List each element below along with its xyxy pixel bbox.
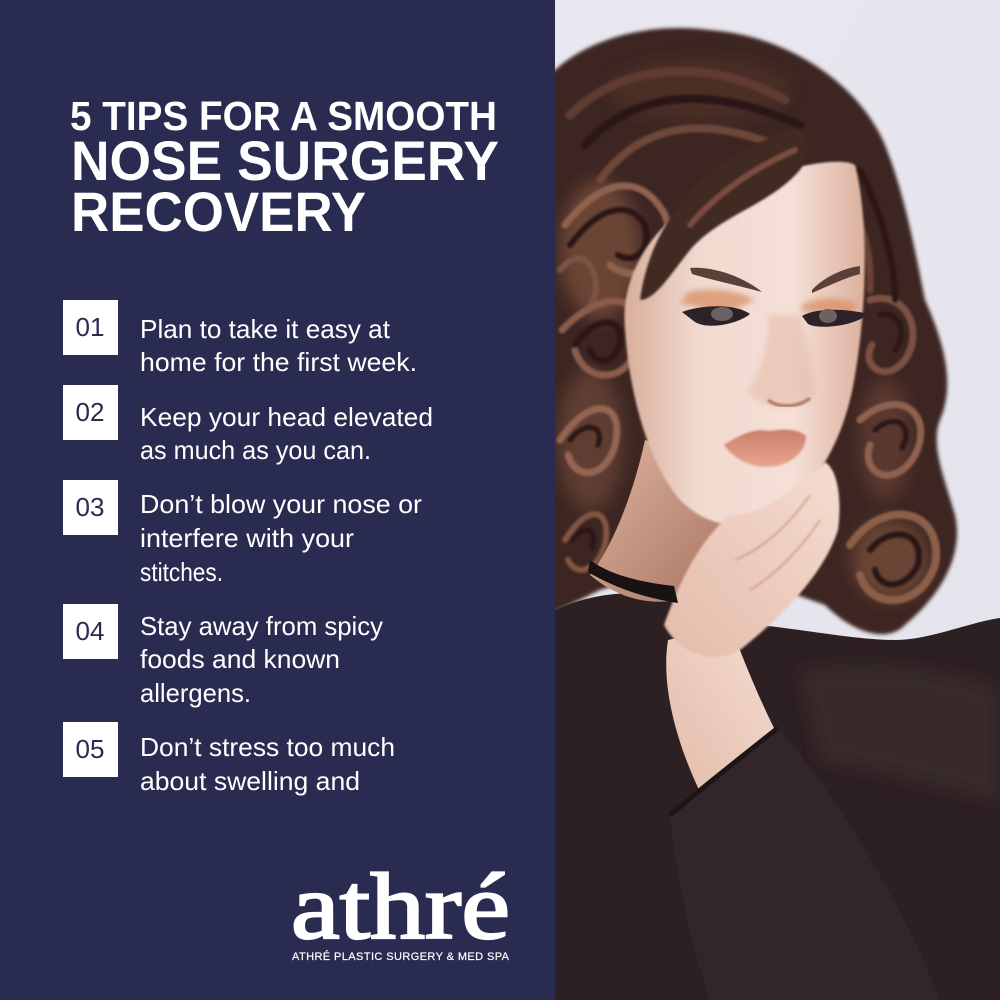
lips (724, 430, 806, 467)
nostril (768, 398, 810, 406)
number 02: 02 (76, 397, 104, 427)
number box 02 (63, 385, 118, 440)
tip 04 text: allergens. (140, 678, 251, 708)
finger lines (735, 495, 820, 590)
left eyebrow (690, 268, 762, 292)
number 05: 05 (76, 734, 104, 764)
sleeve cuff (670, 728, 778, 815)
dress sheen (809, 671, 998, 794)
tip 02 (63, 385, 433, 465)
tip 03 text: interfere with your (140, 523, 354, 553)
dress (555, 593, 1000, 1000)
number 01: 01 (76, 312, 104, 342)
panel: navy text panel (0, 0, 555, 1000)
hair strands (560, 71, 936, 600)
left eye (680, 290, 755, 326)
logo (291, 855, 510, 963)
photo background (555, 0, 1000, 640)
title (70, 93, 499, 243)
title line 1: 5 TIPS FOR A SMOOTH (70, 93, 497, 139)
number box 03 (63, 480, 118, 535)
tip 04 (63, 604, 383, 708)
tip 04 text: foods and known (140, 644, 340, 674)
fringe highlight (690, 150, 795, 225)
hair tonal blobs (558, 60, 928, 600)
right eyebrow (812, 266, 860, 293)
logo tagline: ATHRÉ PLASTIC SURGERY & MED SPA (292, 950, 510, 963)
title line 3: RECOVERY (71, 180, 366, 243)
tip 03 text: stitches. (140, 557, 223, 587)
title line 2: NOSE SURGERY (71, 129, 499, 192)
hair back mass (520, 28, 957, 634)
tip 02 text: as much as you can. (140, 435, 371, 465)
hand (664, 462, 839, 657)
number box 01 (63, 300, 118, 355)
forearm (666, 638, 774, 788)
tip 05 text: Don’t stress too much (140, 732, 395, 762)
neck (590, 440, 735, 602)
number 03: 03 (76, 492, 104, 522)
tip 01 (63, 300, 417, 377)
fringe hair sweep (640, 129, 807, 300)
number box 04 (63, 604, 118, 659)
tip 01 text: Plan to take it easy at (140, 314, 391, 344)
logo wordmark: athré (291, 855, 510, 959)
nose shading (748, 315, 815, 407)
tip 04 text: Stay away from spicy (140, 611, 383, 641)
tip 01 text: home for the first week. (140, 347, 417, 377)
number 04: 04 (76, 616, 104, 646)
right eye (802, 298, 868, 327)
tip 05 text: about swelling and (140, 766, 360, 796)
face (624, 162, 865, 525)
tip 03 (63, 480, 422, 587)
photo: woman with curly brown hair (520, 0, 1000, 1000)
sleeve (713, 752, 752, 783)
tip 02 text: Keep your head elevated (140, 402, 433, 432)
tip 05 (63, 722, 395, 796)
tip 03 text: Don’t blow your nose or (140, 489, 422, 519)
collar (588, 560, 678, 603)
number box 05 (63, 722, 118, 777)
